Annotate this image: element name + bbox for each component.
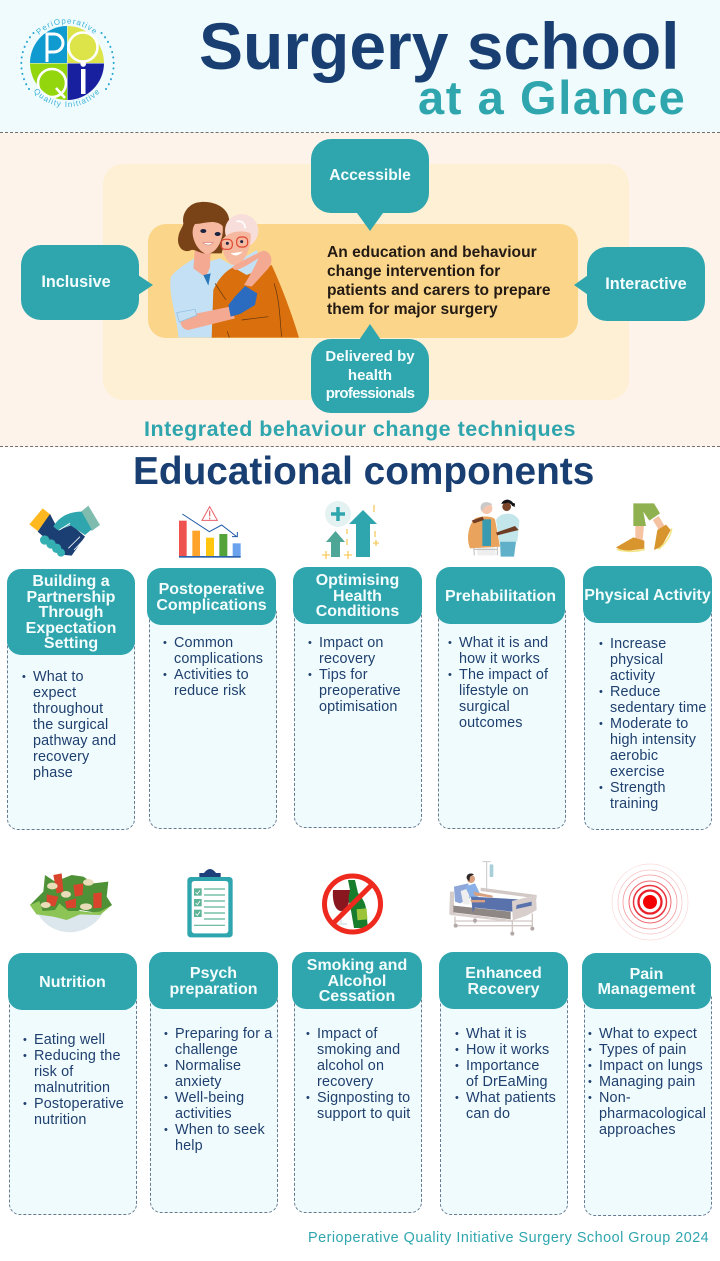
- card: Pain Management: [582, 953, 712, 1216]
- card heading: Recovery: [467, 980, 540, 998]
- callout: Accessible: [311, 139, 429, 231]
- card text: throughout: [33, 701, 103, 717]
- card text: expect: [33, 685, 76, 701]
- card heading: [293, 567, 422, 624]
- card text: Increase: [610, 636, 666, 652]
- callout tail: [360, 324, 380, 339]
- card heading: Management: [598, 981, 695, 998]
- card text: What to: [33, 669, 84, 685]
- card text: Eating well: [34, 1032, 105, 1048]
- card body: [584, 601, 712, 830]
- card text: [448, 635, 548, 731]
- card body: [150, 987, 278, 1213]
- card: Postoperative Complications: [147, 568, 277, 829]
- card text: [599, 636, 706, 812]
- card text: malnutrition: [34, 1080, 110, 1096]
- illustration: nurse hugging older patient: [170, 202, 299, 338]
- card: Optimising Health Conditions: [293, 567, 422, 828]
- callout bubble: professionals: [326, 385, 414, 402]
- card text: [163, 635, 263, 699]
- card text: [164, 1026, 272, 1154]
- card: Nutrition: [8, 953, 137, 1215]
- card: Building a Partnership Through Expectation Setting: [7, 569, 135, 830]
- card text: Managing pain: [599, 1074, 695, 1090]
- card text: Preparing for a: [175, 1026, 272, 1042]
- card text: optimisation: [319, 699, 398, 715]
- heading: Integrated behaviour change techniques: Integrated behaviour change techniques: [144, 417, 576, 441]
- card heading: Physical Activity: [584, 587, 711, 604]
- card text: reduce risk: [174, 683, 246, 699]
- card text: What patients: [466, 1090, 556, 1106]
- definition text: An education and behaviour: [327, 244, 537, 261]
- card text: [22, 669, 116, 781]
- callout bubble: Inclusive: [41, 273, 111, 291]
- callout bubble: [311, 139, 429, 213]
- card text: support to quit: [317, 1106, 410, 1122]
- card text: pharmacological: [599, 1106, 706, 1122]
- card text: recovery: [33, 749, 89, 765]
- card: Psych preparation: [149, 952, 278, 1213]
- card text: The impact of: [459, 667, 548, 683]
- callout: Interactive: [574, 247, 705, 321]
- card text: Tips for: [319, 667, 368, 683]
- card text: sedentary time: [610, 700, 706, 716]
- card text: Moderate to: [610, 716, 688, 732]
- panel: outer cream box: [103, 164, 629, 400]
- card heading: [583, 566, 712, 623]
- card text: activities: [175, 1106, 232, 1122]
- callout bubble: health: [348, 367, 392, 384]
- card text: the surgical: [33, 717, 108, 733]
- logo: PeriOperative Quality Initiative: [20, 19, 115, 108]
- panel: inner definition box: [148, 224, 578, 338]
- card heading: [582, 953, 711, 1009]
- card text: Signposting to: [317, 1090, 410, 1106]
- card text: pathway and: [33, 733, 116, 749]
- card text: approaches: [599, 1122, 676, 1138]
- card heading: Building a: [32, 573, 110, 590]
- card text: [308, 635, 401, 715]
- card heading: [147, 568, 276, 625]
- card text: recovery: [317, 1074, 373, 1090]
- icon: pain target rings: [612, 864, 688, 940]
- intro panel background: [0, 133, 720, 447]
- card text: smoking and: [317, 1042, 400, 1058]
- card text: [306, 1026, 410, 1122]
- card text: how it works: [459, 651, 540, 667]
- card heading: Setting: [44, 635, 98, 652]
- card text: recovery: [319, 651, 375, 667]
- card text: can do: [466, 1106, 510, 1122]
- card heading: [436, 567, 565, 624]
- card text: phase: [33, 765, 73, 781]
- card heading: Cessation: [319, 988, 395, 1005]
- card body: [9, 988, 137, 1215]
- title: [199, 9, 686, 124]
- card text: Activities to: [174, 667, 249, 683]
- callout bubble: Interactive: [605, 275, 687, 293]
- card text: lifestyle on: [459, 683, 529, 699]
- card text: aerobic: [610, 748, 658, 764]
- card text: Importance: [466, 1058, 540, 1074]
- card text: help: [175, 1138, 203, 1154]
- card: Physical Activity: [583, 566, 712, 830]
- icon: no alcohol or smoking: [322, 874, 383, 934]
- card heading: Expectation: [26, 620, 116, 637]
- card body: [294, 602, 422, 828]
- card: Enhanced Recovery: [439, 952, 568, 1215]
- card text: high intensity: [610, 732, 696, 748]
- card text: Postoperative: [34, 1096, 124, 1112]
- icon: optimising arrows: [322, 501, 379, 559]
- definition text: patients and carers to prepare: [327, 282, 551, 299]
- card heading: Health: [333, 588, 382, 605]
- card text: [23, 1032, 124, 1128]
- card text: What to expect: [599, 1026, 697, 1042]
- card heading: Through: [39, 604, 103, 621]
- card heading: Nutrition: [39, 974, 106, 991]
- card text: Strength: [610, 780, 666, 796]
- definition text: [327, 244, 551, 318]
- card text: nutrition: [34, 1112, 87, 1128]
- card body: [584, 988, 712, 1216]
- card text: Types of pain: [599, 1042, 687, 1058]
- card text: Non-: [599, 1090, 631, 1106]
- logo: PeriOperative Quality Initiative: PeriOperative: [36, 19, 96, 34]
- heading: Educational components: Educational components: [133, 450, 594, 493]
- card text: When to seek: [175, 1122, 265, 1138]
- card text: Reduce: [610, 684, 661, 700]
- card heading: Conditions: [316, 603, 399, 620]
- card text: physical: [610, 652, 663, 668]
- callout: Inclusive: [21, 245, 153, 320]
- icon: walking legs in trainers: [616, 503, 672, 552]
- callout bubble: Delivered by: [325, 348, 415, 365]
- card heading: Postoperative: [159, 581, 264, 598]
- icon: clipboard checklist: [187, 869, 233, 938]
- card text: What it is: [466, 1026, 527, 1042]
- card body: [440, 987, 568, 1215]
- card text: Normalise: [175, 1058, 241, 1074]
- card body: [149, 603, 277, 829]
- card text: exercise: [610, 764, 665, 780]
- card text: of DrEaMing: [466, 1074, 548, 1090]
- icon: handshake: [29, 506, 100, 557]
- icon: salad bowl: [30, 873, 112, 932]
- callout bubble: [587, 247, 705, 321]
- card heading: Optimising: [316, 572, 399, 589]
- footer credit: Perioperative Quality Initiative Surgery School Group 2024: [308, 1230, 709, 1246]
- callout tail: [574, 276, 587, 294]
- card heading: Enhanced: [465, 965, 542, 982]
- icon: declining bar chart with warning: [179, 506, 241, 558]
- card text: [599, 1026, 706, 1138]
- card text: How it works: [466, 1042, 549, 1058]
- callout bubble: Accessible: [329, 167, 411, 184]
- definition text: them for major surgery: [327, 301, 498, 318]
- title line 2: at a Glance: [418, 71, 686, 124]
- card heading: [149, 952, 278, 1009]
- card: Prehabilitation: [436, 567, 566, 829]
- icon: patient in hospital bed: [449, 861, 537, 936]
- card text: Impact of: [317, 1026, 378, 1042]
- card text: alcohol on: [317, 1058, 384, 1074]
- callout bubble: [311, 339, 429, 413]
- callout bubble: [21, 245, 139, 320]
- card text: complications: [174, 651, 263, 667]
- card heading: preparation: [169, 980, 258, 998]
- card body: [294, 987, 422, 1213]
- card heading: Smoking and: [307, 957, 407, 974]
- icon: patient with walker and carer: [468, 500, 520, 557]
- card text: preoperative: [319, 683, 401, 699]
- card heading: [8, 953, 137, 1010]
- card body: [438, 602, 566, 829]
- card heading: Alcohol: [328, 973, 386, 990]
- card heading: Complications: [156, 596, 267, 614]
- card text: Impact on: [319, 635, 384, 651]
- card text: Well-being: [175, 1090, 244, 1106]
- card text: challenge: [175, 1042, 238, 1058]
- card heading: Psych: [190, 965, 237, 982]
- card text: anxiety: [175, 1074, 222, 1090]
- card text: surgical: [459, 699, 510, 715]
- card heading: Prehabilitation: [445, 588, 556, 605]
- card heading: Partnership: [27, 589, 115, 606]
- callout tail: [139, 276, 153, 294]
- card body: [7, 629, 135, 830]
- card text: What it is and: [459, 635, 548, 651]
- card text: activity: [610, 668, 655, 684]
- card text: risk of: [34, 1064, 73, 1080]
- logo: PeriOperative Quality Initiative: Quality Initiative: [34, 88, 100, 108]
- callout tail: [357, 213, 383, 231]
- card text: Reducing the: [34, 1048, 121, 1064]
- callout: Delivered by health professionals: [311, 324, 429, 413]
- header band: [0, 0, 720, 133]
- card heading: Pain: [630, 966, 663, 982]
- card text: training: [610, 796, 658, 812]
- title line 1: Surgery school: [199, 9, 679, 83]
- card text: Impact on lungs: [599, 1058, 703, 1074]
- card: Smoking and Alcohol Cessation: [292, 952, 422, 1213]
- card text: outcomes: [459, 715, 523, 731]
- definition text: change intervention for: [327, 263, 500, 280]
- card heading: [292, 952, 422, 1009]
- card heading: [7, 569, 135, 655]
- card text: [455, 1026, 556, 1122]
- card text: Common: [174, 635, 233, 651]
- card heading: [439, 952, 568, 1009]
